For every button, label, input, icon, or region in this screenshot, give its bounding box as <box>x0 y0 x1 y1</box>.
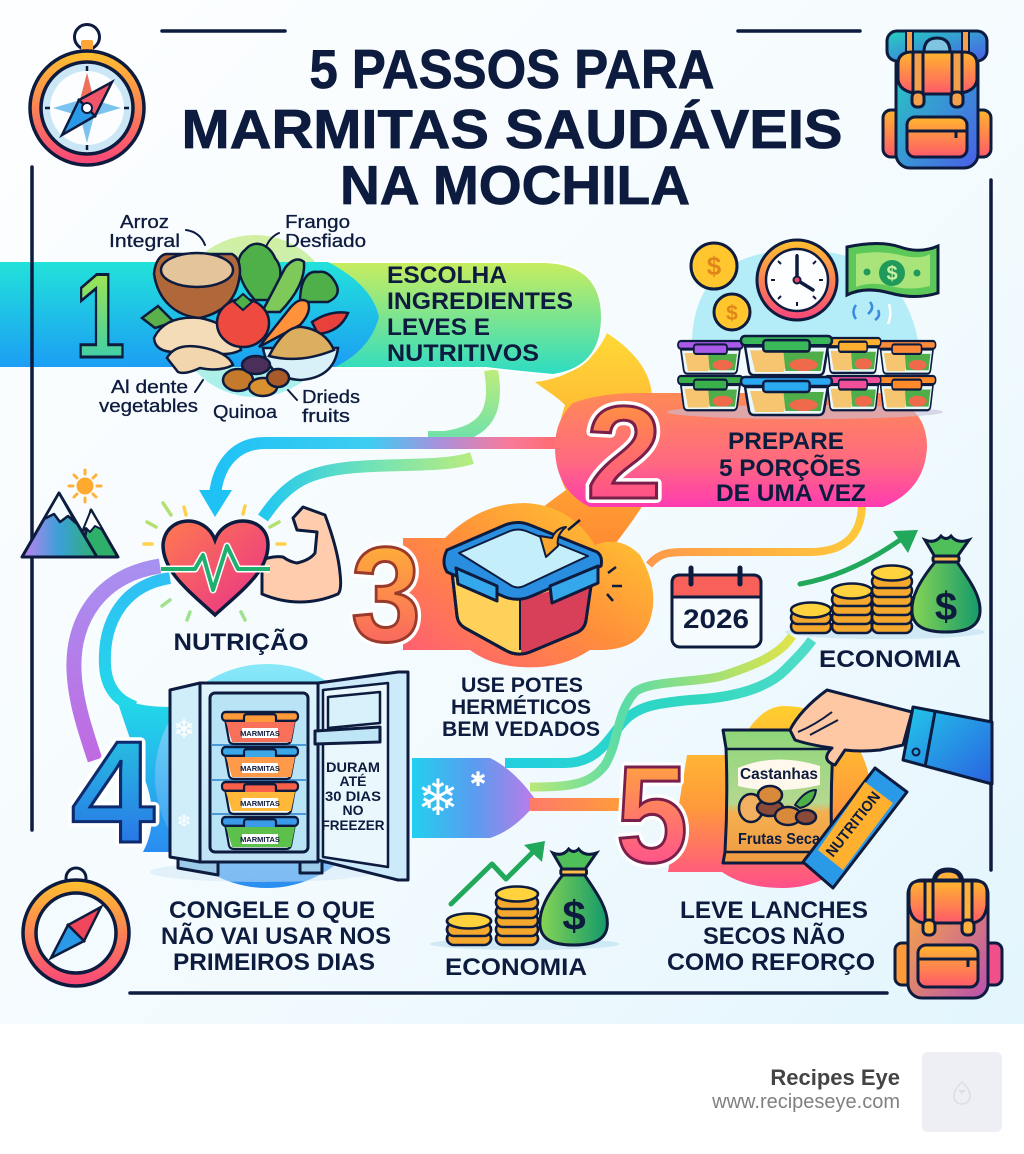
step 3 text <box>442 674 600 741</box>
step 5 text: LEVE LANCHES <box>680 897 868 924</box>
connector: teal and lime lines to economy <box>505 636 812 787</box>
ingredient labels: fruits <box>302 406 350 426</box>
freezer side snowflakes <box>173 714 195 831</box>
title <box>182 38 842 216</box>
connector: purple ribbon <box>74 566 160 760</box>
number 4: 4 <box>71 711 155 873</box>
icon: nutrition bar <box>803 768 907 888</box>
ingredient labels: Desfiado <box>285 231 366 251</box>
icon: stacked meal containers <box>678 336 936 415</box>
icon: savings bottom <box>430 841 620 950</box>
icon: open freezer <box>170 672 408 880</box>
number 5: 5 <box>616 738 688 892</box>
step 4 text: NÃO VAI USAR NOS <box>161 922 391 950</box>
step 4 text: PRIMEIROS DIAS <box>173 949 375 976</box>
step 2 heading: 5 PORÇÕES <box>719 454 861 482</box>
connector: blue ribbon into step 4 <box>105 578 172 852</box>
freezer shadow <box>150 862 374 882</box>
footer brand text <box>711 1065 900 1113</box>
icon: heart <box>161 521 270 615</box>
frame lines <box>32 31 991 993</box>
step 1 heading: ESCOLHA <box>387 262 507 289</box>
step 3 text: USE POTES <box>461 674 583 697</box>
step 2 band <box>555 393 927 507</box>
freezer door text <box>322 759 384 833</box>
nutrition label: NUTRIÇÃO <box>174 628 308 656</box>
icon: backpack top right <box>883 31 991 168</box>
icon: calendar 2026: 2026 <box>683 604 749 634</box>
step 3 text: HERMÉTICOS <box>451 696 591 719</box>
icon: banknote <box>847 244 938 296</box>
freezer meal labels: MARMITAS <box>240 799 280 808</box>
step 1 heading: INGREDIENTES <box>387 288 573 315</box>
freezer meal labels: MARMITAS <box>240 835 280 844</box>
step 5 text: SECOS NÃO <box>703 922 845 950</box>
icon: sun <box>69 470 101 502</box>
steam lines <box>854 302 890 324</box>
connector: coral line to step 5 <box>530 798 622 811</box>
icon: calendar 2026 <box>672 568 761 647</box>
number 3: 3 <box>351 519 421 670</box>
freezer door text: ATÉ <box>340 773 366 789</box>
number 1: 1 <box>75 249 125 383</box>
ingredient labels: Al dente <box>111 377 188 397</box>
footer brand text: Recipes Eye <box>770 1065 900 1090</box>
icon: snack bag <box>723 730 833 863</box>
connector: orange line to economy <box>649 503 862 565</box>
freezer door text: NO <box>342 802 364 818</box>
icon: savings top <box>785 530 985 639</box>
ingredient backdrop circle <box>174 235 336 397</box>
footer logo tile <box>922 1052 1002 1132</box>
step 2 backdrop blob <box>692 250 918 340</box>
step 3 text: BEM VEDADOS <box>442 718 600 741</box>
title: NA MOCHILA <box>340 154 690 216</box>
freezer side snowflakes: ❄ <box>176 811 192 831</box>
icon: hand with sleeve <box>790 690 992 784</box>
connector: green line from step 1 <box>263 370 493 518</box>
ingredient labels: vegetables <box>99 396 198 416</box>
step 1 band <box>0 262 602 375</box>
arrow: step 2 to nutrition <box>199 443 560 517</box>
icon: snack bag: Frutas Seca <box>738 831 820 848</box>
connector: yellow swoosh from step 1 to step 3 <box>500 333 652 548</box>
icon: compass bottom left <box>23 868 129 986</box>
step 4 text <box>161 897 391 976</box>
ingredient labels: Quinoa <box>213 402 278 422</box>
ingredient labels: Frango <box>285 212 350 232</box>
number 3: 3 <box>351 519 421 670</box>
title: 5 PASSOS PARA <box>310 38 714 100</box>
ingredient labels: Integral <box>109 231 180 251</box>
step 4 text: CONGELE O QUE <box>169 897 375 924</box>
icon: snowflake <box>417 769 486 826</box>
step 2 heading: DE UMA VEZ <box>716 480 866 507</box>
icon: ingredients group <box>142 244 348 396</box>
freezer door text: FREEZER <box>322 817 384 833</box>
freezer meal labels: MARMITAS <box>240 729 280 738</box>
icon: airtight container <box>444 520 622 654</box>
step 1 heading: LEVES E <box>387 314 490 341</box>
economy label top: ECONOMIA <box>819 646 961 673</box>
icon: banknote: $ <box>886 263 898 285</box>
label leader lines <box>186 230 297 400</box>
icon: snowflake: ✱ <box>470 769 486 791</box>
freezer meal labels <box>240 728 280 844</box>
freezer door text: DURAM <box>326 759 380 775</box>
icon: clock <box>757 240 837 320</box>
number 2: 2 <box>586 379 662 526</box>
icon: compass top left <box>30 24 144 165</box>
freezer door text: 30 DIAS <box>325 788 381 804</box>
freezer meal boxes <box>222 712 298 849</box>
number 4: 4 <box>71 711 155 873</box>
ingredient labels: Drieds <box>302 387 360 407</box>
icon: mountains <box>22 493 118 557</box>
economy label bottom: ECONOMIA <box>445 954 587 981</box>
step 3 blob <box>403 503 653 667</box>
step 5 text: COMO REFORÇO <box>667 949 875 976</box>
number 5: 5 <box>616 738 688 892</box>
step 1 heading: NUTRITIVOS <box>387 340 539 367</box>
step 5 text <box>667 897 875 976</box>
icon: flexed arm <box>262 507 341 602</box>
step 4 freezer band <box>412 758 537 838</box>
ingredient labels <box>99 212 366 426</box>
shadow below containers <box>667 405 943 419</box>
icon: coins: $ <box>726 302 738 325</box>
icon: coins <box>691 243 750 330</box>
heart rays <box>144 503 285 620</box>
icon: snack bag: Castanhas <box>740 766 818 783</box>
icon: nutrition bar: NUTRITION <box>823 789 884 860</box>
icon: coins: $ <box>707 251 722 281</box>
step 1 heading <box>387 262 573 367</box>
icon: snowflake: ❄ <box>417 770 459 826</box>
step 5 blob <box>668 706 871 888</box>
icon: savings bottom: $ <box>562 892 586 939</box>
footer brand text: www.recipeseye.com <box>711 1091 900 1113</box>
ingredient labels: Arroz <box>120 212 169 232</box>
title: MARMITAS SAUDÁVEIS <box>182 98 842 160</box>
freezer backdrop circle <box>155 664 379 888</box>
icon: savings top: $ <box>935 585 957 629</box>
step 2 heading: PREPARE <box>728 428 844 455</box>
step 2 heading <box>716 428 866 507</box>
number 2: 2 <box>586 379 662 526</box>
freezer meal labels: MARMITAS <box>240 764 280 773</box>
freezer side snowflakes: ❄ <box>173 714 195 744</box>
icon: backpack bottom right <box>895 870 1002 998</box>
